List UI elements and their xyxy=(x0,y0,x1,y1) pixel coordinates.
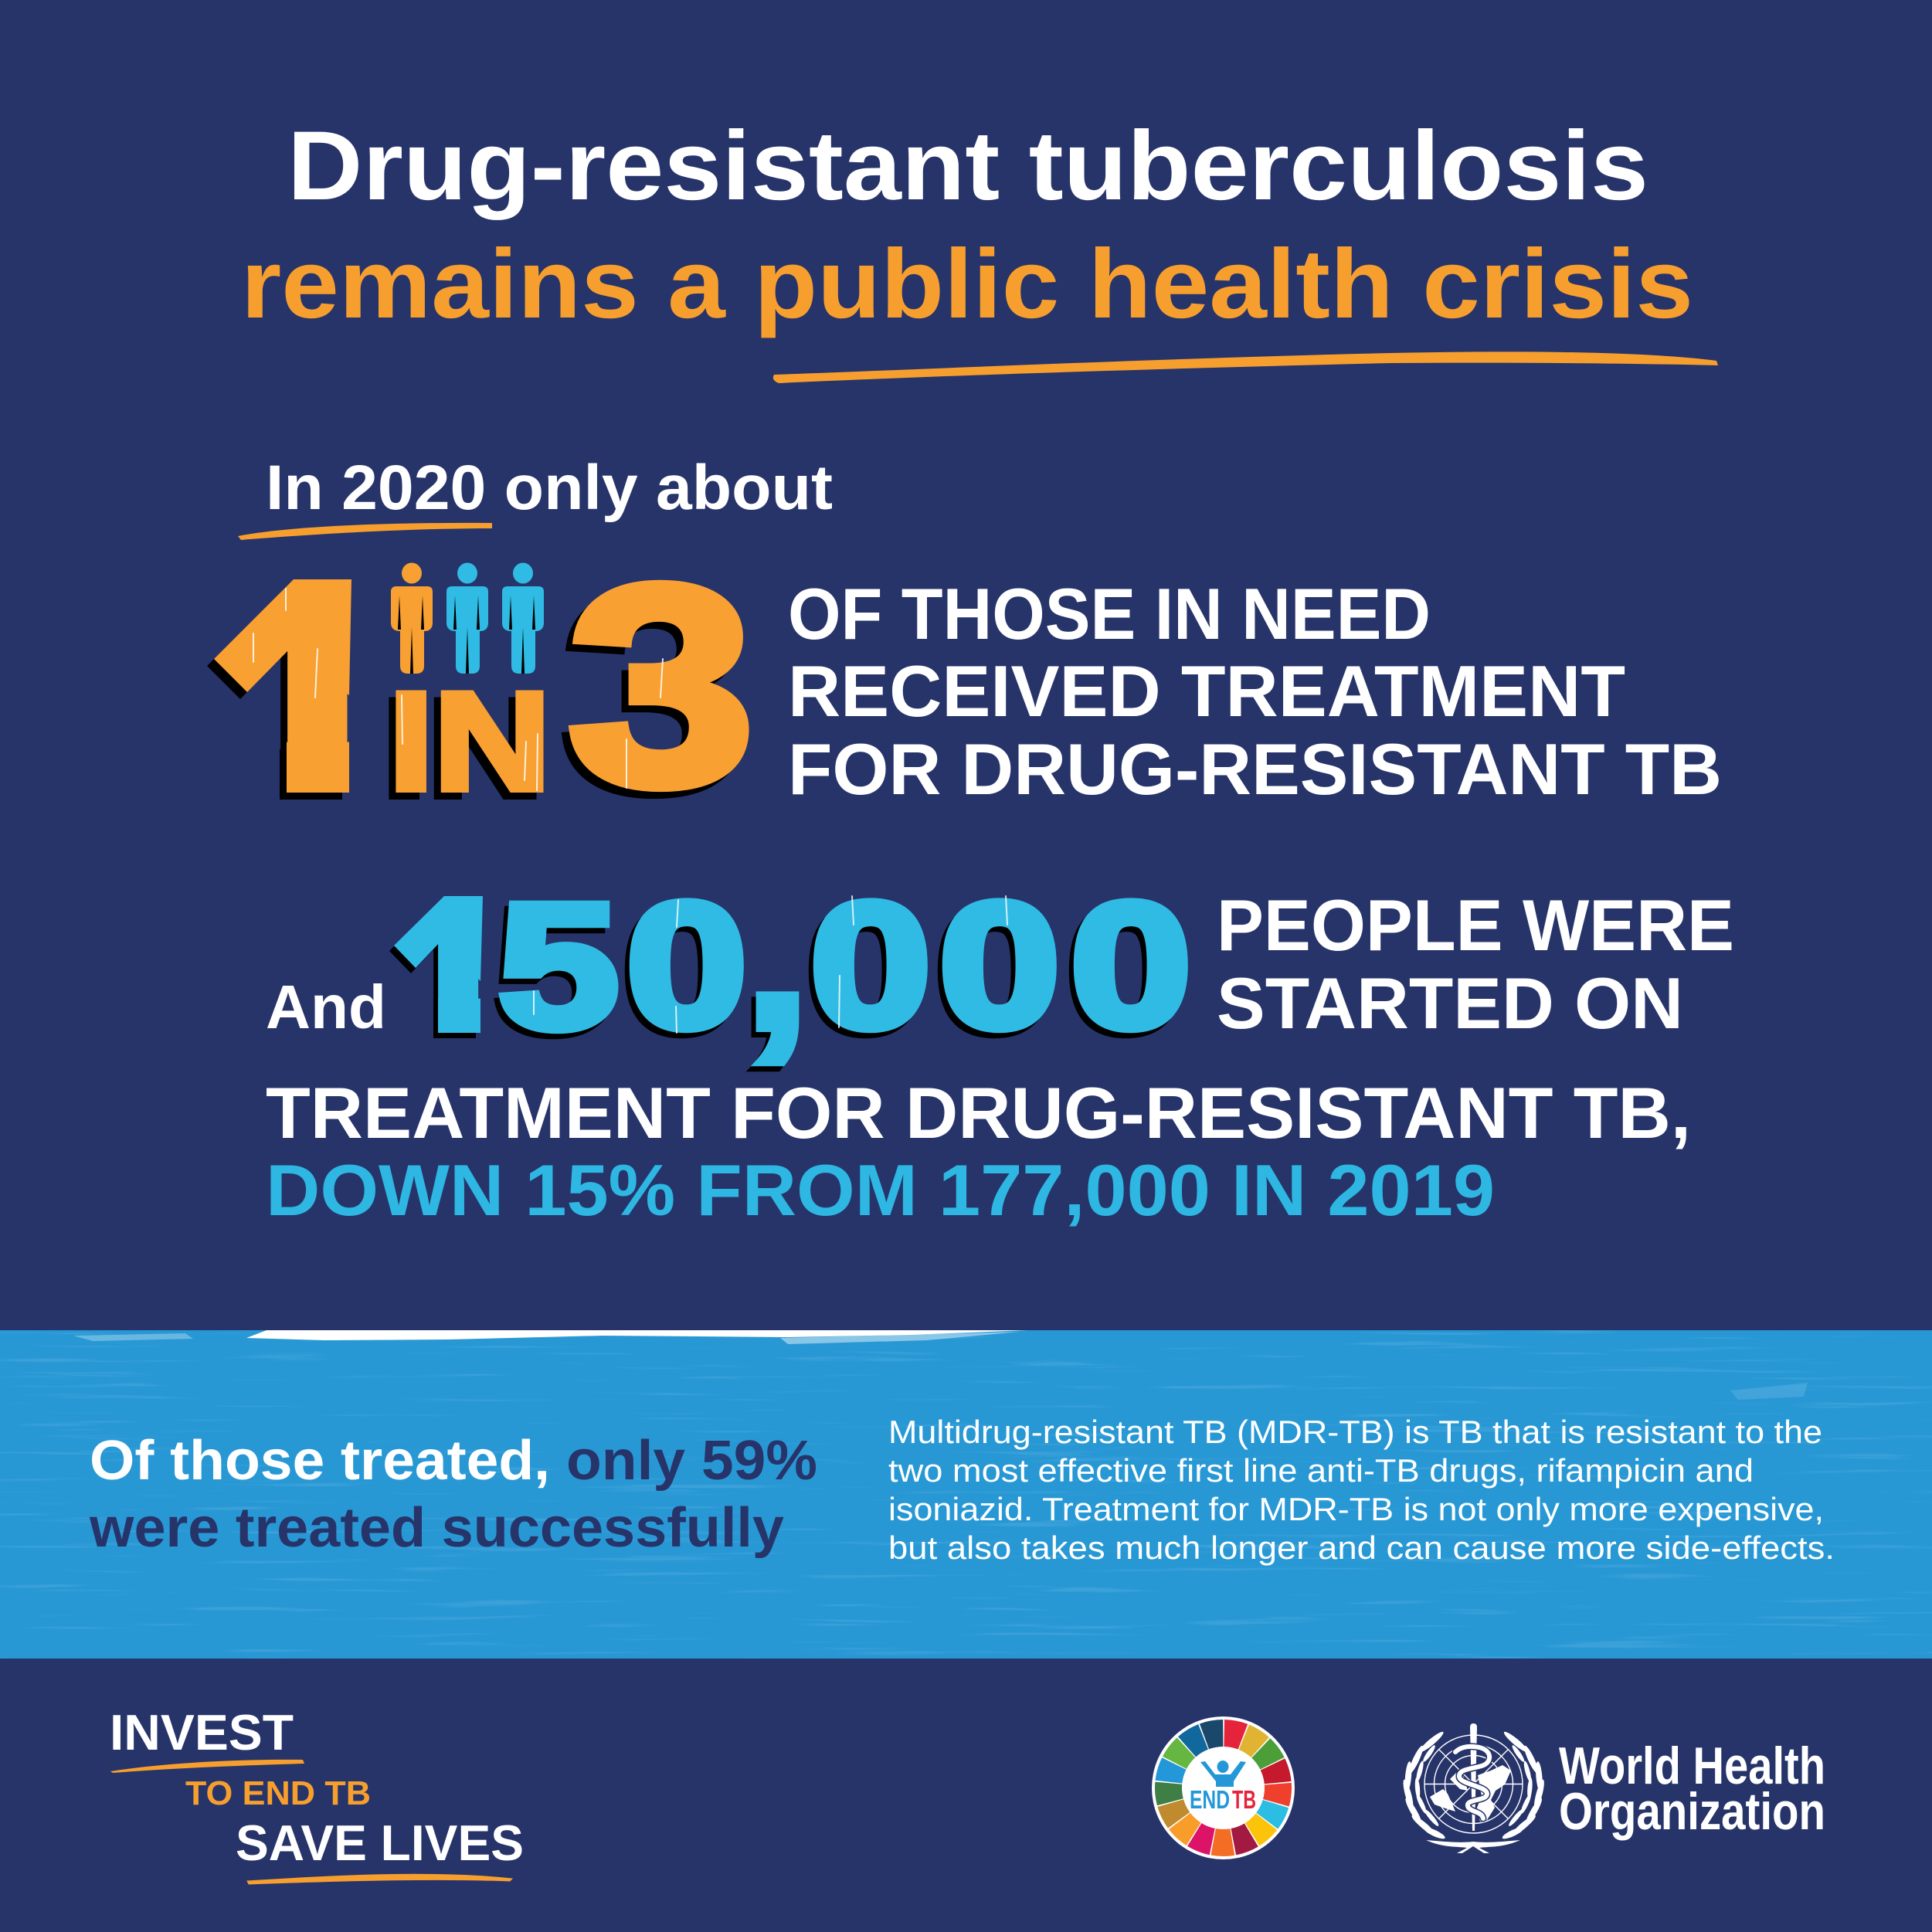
text: MDR-TB definition: but also takes much longer and can cause more side-effects. xyxy=(888,1530,1835,1566)
text: World Health Organization: World Health xyxy=(1559,1737,1825,1795)
slogan underline 1 xyxy=(110,1760,304,1773)
icon: blue person xyxy=(446,562,488,674)
landmasses xyxy=(1430,1765,1511,1822)
text: END TB: TB xyxy=(1232,1785,1256,1814)
big numerals 1 in 3: IN xyxy=(389,664,551,820)
logo: WHO emblem xyxy=(1401,1723,1546,1853)
text: MDR-TB definition xyxy=(888,1414,1835,1566)
icon: orange person xyxy=(391,562,433,674)
stat: 1 in 3 xyxy=(207,562,749,800)
text: people were started on xyxy=(1217,885,1734,1044)
panel: blue band xyxy=(0,1330,1932,1659)
title underline xyxy=(773,351,1718,383)
icon: person with raised arms xyxy=(1200,1761,1246,1787)
title xyxy=(241,110,1693,338)
laurel wreath xyxy=(1401,1730,1546,1853)
big numerals 150,000: 0 xyxy=(626,866,747,1064)
slogan underline 2 xyxy=(247,1874,512,1884)
text: of those in need xyxy=(788,573,1722,810)
white brush edge xyxy=(246,1330,1027,1340)
paint streaks on 150,000 xyxy=(534,896,1007,1033)
text: World Health Organization xyxy=(1559,1737,1825,1841)
text: of those treated: Of those treated, xyxy=(90,1430,550,1492)
big numerals 1 in 3: 1 xyxy=(228,467,396,867)
text: down 15%: DOWN 15% FROM 177,000 IN 2019 xyxy=(266,1149,1495,1231)
big numerals 150,000: 0 xyxy=(1071,866,1191,1064)
icon: three people xyxy=(391,562,544,674)
staff and serpent xyxy=(1455,1723,1489,1831)
text: MDR-TB definition: two most effective first line anti-TB drugs, rifampicin and xyxy=(888,1452,1754,1489)
text: of those in need: FOR DRUG-RESISTANT TB xyxy=(788,728,1722,810)
big numerals 150,000: , xyxy=(743,828,811,1075)
slogan: SAVE LIVES xyxy=(236,1815,524,1871)
text: of those in need: OF THOSE IN NEED xyxy=(788,573,1431,654)
slogan xyxy=(110,1704,524,1884)
text: people were started on: STARTED ON xyxy=(1217,963,1683,1044)
title: remains a public health crisis xyxy=(241,229,1693,338)
text: of those treated: only 59% xyxy=(566,1430,817,1492)
text: END TB: END xyxy=(1190,1785,1230,1814)
text: MDR-TB definition: isoniazid. Treatment for MDR-TB is not only more expensive, xyxy=(888,1491,1824,1527)
intro text: In 2020 only about xyxy=(266,453,833,523)
big numerals 150,000 xyxy=(389,896,1188,1072)
text: And: And xyxy=(266,973,386,1041)
paint streaks on numerals xyxy=(253,589,663,790)
big numerals 150,000: 5 xyxy=(498,867,619,1065)
stat: 150,000 xyxy=(389,895,1188,1072)
text: MDR-TB definition: Multidrug-resistant TB (MDR-TB) is TB that is resistant to the xyxy=(888,1414,1822,1450)
text: of those treated xyxy=(89,1430,817,1559)
text: of those treated: were treated successfully xyxy=(89,1497,784,1559)
text: World Health Organization: Organization xyxy=(1559,1782,1825,1841)
big numerals 150,000: 1 xyxy=(402,827,508,1078)
big numerals 150,000: 0 xyxy=(810,866,931,1064)
big numerals 1 in 3: 3 xyxy=(568,527,755,844)
text: people were started on: PEOPLE WERE xyxy=(1217,885,1734,966)
title: Drug-resistant tuberculosis xyxy=(287,110,1648,220)
slogan: TO END TB xyxy=(185,1774,371,1812)
globe xyxy=(1424,1735,1523,1833)
logo: End TB wheel xyxy=(1146,1710,1301,1866)
text: treatment for drug-resistant TB: TREATMENT FOR DRUG-RESISTANT TB, xyxy=(266,1072,1691,1153)
text: of those in need: RECEIVED TREATMENT xyxy=(788,650,1625,732)
big numerals 1 in 3 xyxy=(207,579,749,800)
icon: blue person xyxy=(502,562,544,674)
intro underline xyxy=(238,523,492,540)
slogan: INVEST xyxy=(110,1704,294,1761)
big numerals 150,000: 0 xyxy=(939,866,1060,1064)
